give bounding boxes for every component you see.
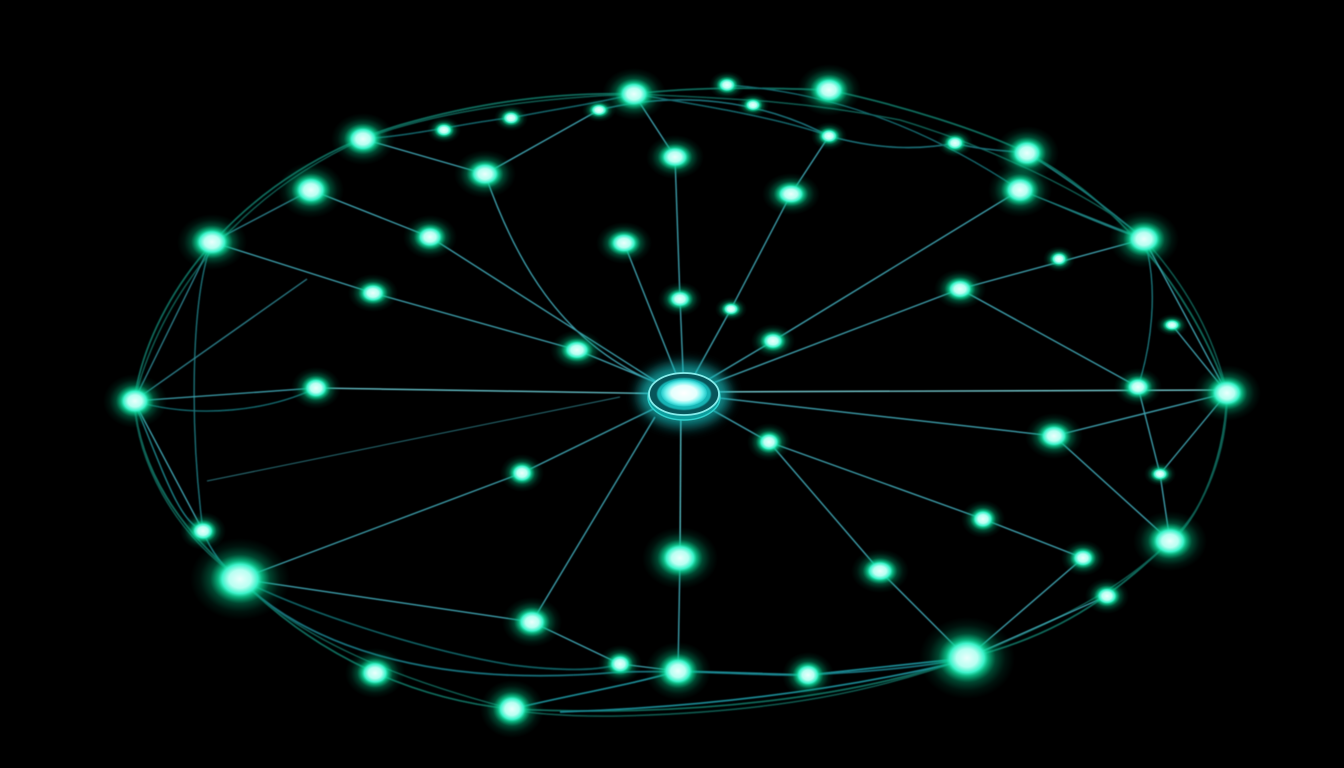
outer nodes: [103, 64, 1261, 738]
inner nodes: [291, 135, 1176, 647]
outer ring lines: [134, 85, 1227, 716]
spoke lines: [134, 94, 1227, 671]
central hub: [638, 363, 730, 427]
